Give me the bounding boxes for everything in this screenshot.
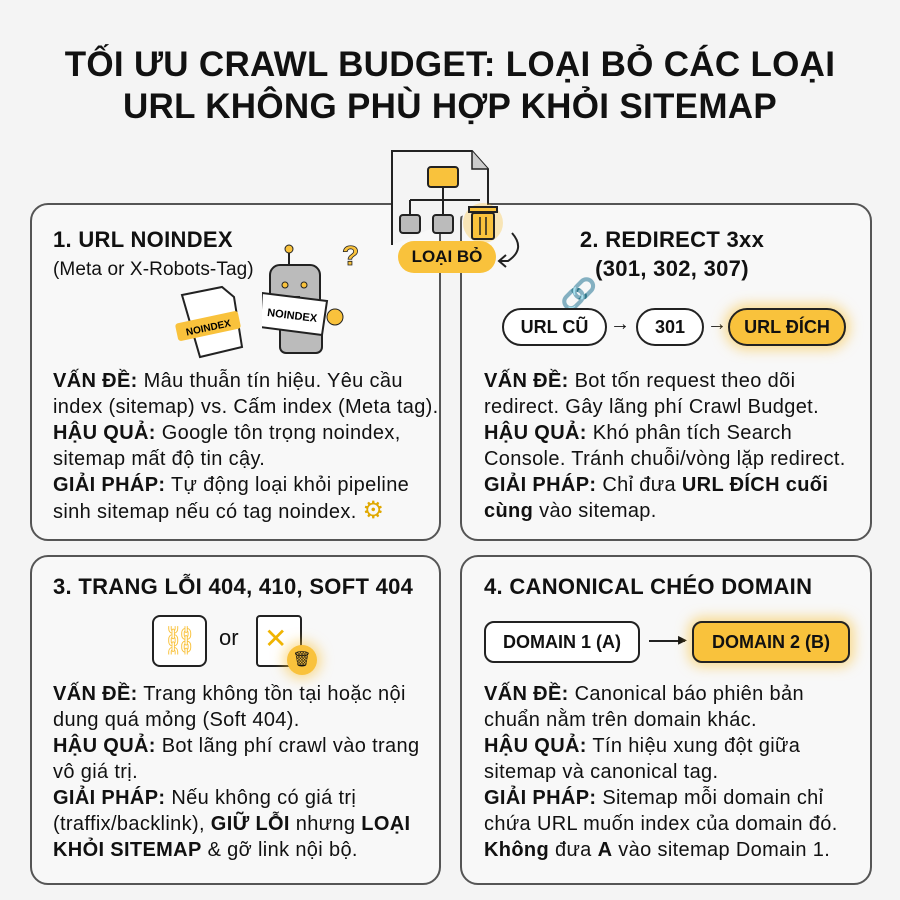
- text 3: HẬU QUẢ: Bot lãng phí crawl vào trang: [53, 735, 419, 757]
- text 4: GIẢI PHÁP: Sitemap mỗi domain chỉ: [484, 787, 823, 809]
- heading 2: (301, 302, 307): [595, 256, 749, 281]
- box: domain 2: DOMAIN 2 (B): [712, 632, 830, 652]
- pill: loai bo: [398, 241, 496, 273]
- icon: robot: NOINDEX: [267, 307, 318, 325]
- text 2: Console. Tránh chuỗi/vòng lặp redirect.: [484, 448, 846, 470]
- text 3: vô giá trị.: [53, 761, 138, 783]
- heading 3: 3. TRANG LỖI 404, 410, SOFT 404: [53, 574, 413, 599]
- domain flow: ▸: [678, 629, 687, 649]
- pill: loai bo: LOẠI BỎ: [412, 247, 482, 266]
- icons: broken link or deleted doc: [152, 615, 328, 686]
- icon: noindex doc: [175, 286, 244, 358]
- text 4: [484, 682, 838, 861]
- icon: broken link: ⛓: [162, 625, 197, 656]
- panel: 4 canonical: [460, 555, 872, 885]
- title: TỐI ƯU CRAWL BUDGET: LOẠI BỎ CÁC LOẠI: [65, 45, 835, 84]
- text 3: GIẢI PHÁP: Nếu không có giá trị: [53, 787, 356, 809]
- text 3: [53, 682, 419, 861]
- title: [65, 44, 835, 126]
- text 1: sitemap mất độ tin cậy.: [53, 448, 265, 470]
- text 1: GIẢI PHÁP: Tự động loại khỏi pipeline: [53, 474, 409, 496]
- text 4: chuẩn nằm trên domain khác.: [484, 709, 757, 731]
- arrow: [649, 640, 685, 642]
- text 2: cùng vào sitemap.: [484, 500, 657, 522]
- text 1: index (sitemap) vs. Cấm index (Meta tag).: [53, 396, 439, 418]
- arrow: →: [610, 313, 630, 335]
- text 1: HẬU QUẢ: Google tôn trọng noindex,: [53, 422, 401, 444]
- text 4: VẤN ĐỀ: Canonical báo phiên bản: [484, 683, 804, 705]
- arrow: →: [707, 313, 727, 335]
- text 2: GIẢI PHÁP: Chỉ đưa URL ĐÍCH cuối: [484, 474, 828, 496]
- text 1: [53, 368, 439, 524]
- box: domain 1: DOMAIN 1 (A): [503, 632, 621, 652]
- icon: deleted doc: [256, 615, 302, 667]
- icon: link: 🔗: [560, 278, 597, 311]
- subtitle 1: (Meta or X-Robots-Tag): [53, 259, 254, 280]
- pill: url cu: [502, 308, 607, 346]
- icons: broken link or deleted doc: 🗑: [292, 651, 312, 668]
- domain flow: [484, 608, 862, 676]
- icon: noindex doc: NOINDEX: [185, 318, 232, 339]
- panel: 1 URL noindex: [30, 203, 441, 541]
- text 3: KHỎI SITEMAP & gỡ link nội bộ.: [53, 839, 358, 861]
- text 4: HẬU QUẢ: Tín hiệu xung đột giữa: [484, 735, 800, 757]
- text 3: dung quá mỏng (Soft 404).: [53, 709, 300, 731]
- heading 2: [580, 227, 764, 281]
- text 2: [484, 368, 846, 522]
- icon: robot: ?: [342, 240, 359, 271]
- icon: robot: [262, 240, 359, 354]
- box: domain 1: [484, 621, 640, 663]
- text 2: HẬU QUẢ: Khó phân tích Search: [484, 422, 792, 444]
- heading 4: 4. CANONICAL CHÉO DOMAIN: [484, 574, 812, 599]
- text 3: (traffix/backlink), GIỮ LỖI nhưng LOẠI: [53, 813, 410, 835]
- text 4: sitemap và canonical tag.: [484, 761, 718, 783]
- panel: 2 redirect: [460, 203, 872, 541]
- pill: url dich: [728, 308, 846, 346]
- icon: sitemap doc with trash: [391, 150, 520, 273]
- icon: deleted doc: ✕: [264, 623, 287, 654]
- text 4: chứa URL muốn index của domain đó.: [484, 813, 838, 835]
- text 1: VẤN ĐỀ: Mâu thuẫn tín hiệu. Yêu cầu: [53, 370, 403, 392]
- redirect flow: [502, 277, 858, 358]
- heading 1: 1. URL NOINDEX: [53, 227, 233, 252]
- text 2: VẤN ĐỀ: Bot tốn request theo dõi: [484, 370, 795, 392]
- text 4: Không đưa A vào sitemap Domain 1.: [484, 839, 830, 861]
- panel: 3 404: [30, 555, 441, 885]
- text 2: redirect. Gây lãng phí Crawl Budget.: [484, 396, 819, 418]
- or: or: [219, 625, 239, 650]
- pill: 301: [636, 308, 704, 346]
- pill: 301: 301: [655, 316, 685, 336]
- icon: broken link: [152, 615, 207, 667]
- text 3: VẤN ĐỀ: Trang không tồn tại hoặc nội: [53, 683, 406, 705]
- box: domain 2: [692, 621, 850, 663]
- title: URL KHÔNG PHÙ HỢP KHỎI SITEMAP: [123, 87, 777, 126]
- pill: url dich: URL ĐÍCH: [744, 316, 830, 336]
- heading 2: 2. REDIRECT 3xx: [580, 227, 764, 252]
- text 1: sinh sitemap nếu có tag noindex. ⚙: [53, 497, 384, 524]
- pill: url cu: URL CŨ: [521, 316, 588, 336]
